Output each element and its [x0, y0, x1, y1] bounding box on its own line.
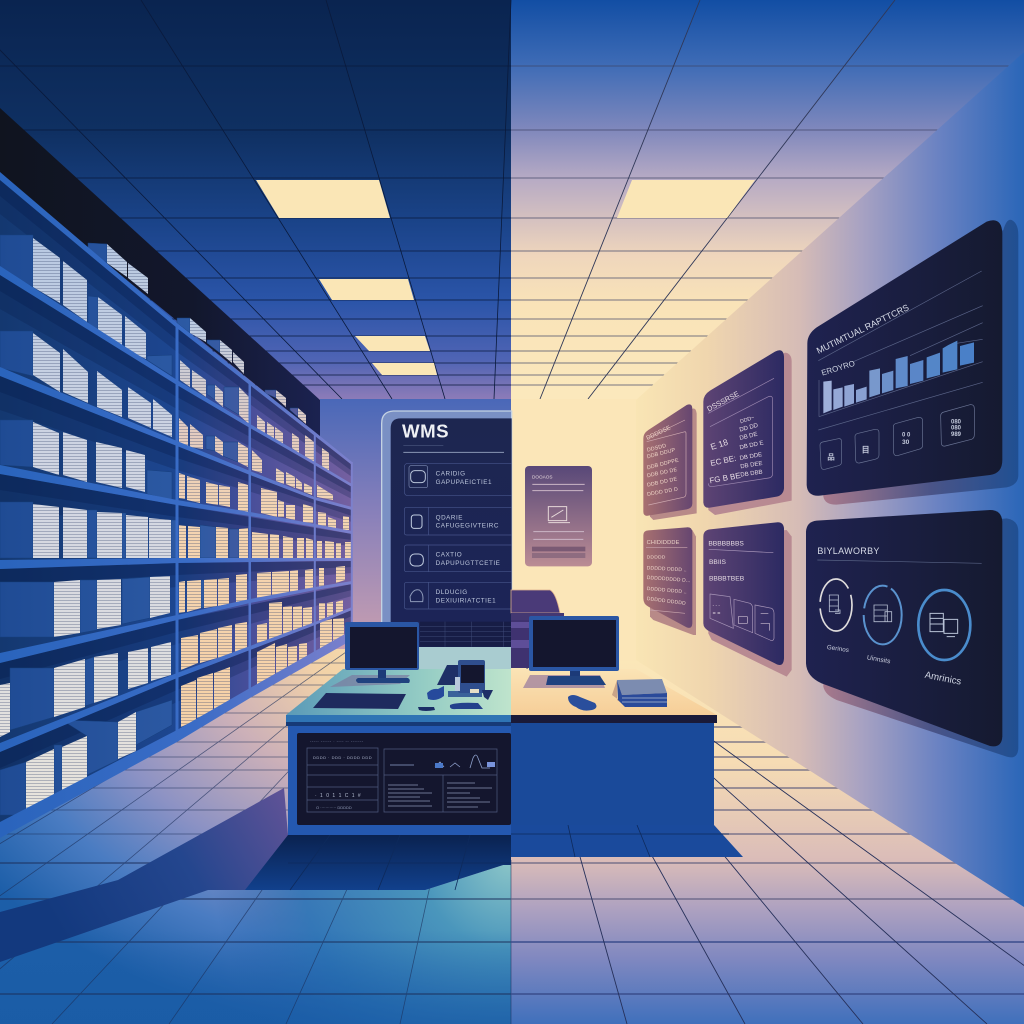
ring gauge: services — [820, 579, 852, 654]
keyboard — [313, 693, 406, 709]
desk front screen: · 1 0 1 1 C 1 # — [315, 793, 362, 799]
desk front screen — [297, 733, 511, 825]
WMS menu text: CAFUGEGIVTEIRC — [436, 522, 499, 529]
wall panel: operations table — [703, 350, 792, 515]
small wall card: DOOAOS — [532, 474, 552, 479]
panel heading: BIYLAWORBY — [817, 546, 880, 556]
status icons — [820, 405, 974, 469]
wall panel: small bottom: DDDDD DDDD .. — [646, 586, 687, 595]
wall panel: operations table: DB DEE — [740, 461, 763, 470]
back wall — [320, 399, 637, 661]
WMS wall panel — [382, 411, 512, 653]
desk front screen: O ············ DDDDD — [316, 805, 352, 810]
mouse — [568, 695, 596, 711]
ring gauge: analytics — [918, 590, 970, 688]
ring gauge: analytics: Amrinics — [924, 670, 962, 688]
wall panel: small bottom: DDDDD DDDD .. — [647, 565, 687, 573]
wall panel: service cards: BBIIS — [709, 559, 727, 566]
wall panel: operations table: EC BE: — [710, 454, 737, 468]
small wall card — [525, 466, 592, 566]
wall panel: operations table: DDD~ — [739, 415, 755, 425]
wall panel: operations table: FG B BE — [709, 471, 741, 485]
wall panel: metrics bar chart: 989 — [951, 432, 962, 438]
floor shadows — [0, 788, 743, 962]
ring gauge: units — [864, 586, 902, 666]
wall panel: operations table: DB DE — [739, 432, 758, 442]
chart title: MUTIMTUAL RAPTTCRS — [815, 302, 911, 356]
wall panel: metrics bar chart: EROYRO — [820, 359, 856, 378]
wall panel: service cards: = = — [713, 611, 720, 617]
wall panel: service cards: BBBBTBEB — [709, 576, 745, 583]
right side wall — [636, 52, 1024, 907]
wall panel: small top — [643, 404, 697, 520]
wall panel: small top: DDDDSE — [646, 425, 672, 442]
WMS menu text: DEXIUIRIATCTIE1 — [436, 598, 496, 605]
wall panel: metrics bar chart: 目 — [862, 446, 870, 455]
wall panel: service cards: - - - — [713, 603, 720, 608]
wall panel: metrics bar chart: 30 — [902, 439, 910, 446]
wall panel: small bottom: DDDDD — [647, 554, 666, 560]
wall panel: small top: DDDD DD D — [647, 487, 679, 498]
desk front screen: DDDD · DDD · DDDD DDD — [313, 755, 372, 760]
ceiling — [0, 0, 1024, 400]
stack of books — [612, 679, 667, 708]
WMS title: WMS — [402, 420, 449, 441]
desk — [286, 647, 717, 835]
ceiling lights — [256, 180, 755, 375]
sofa behind desk — [511, 590, 564, 668]
wall panel: metrics bar chart: 080 — [951, 419, 962, 425]
bars — [823, 341, 974, 413]
shelf boards and uprights — [0, 172, 353, 838]
wall panel: small bottom: CHIDIDDDE — [647, 540, 680, 546]
desk front screen: ----- ------ . ---- -- ------- — [310, 738, 364, 743]
wall panel: operations table: DSSSRSE — [705, 389, 741, 413]
wall panel: small top: DDB DD DE — [647, 467, 678, 479]
WMS menu rows — [404, 463, 512, 609]
left monitor — [345, 622, 419, 683]
wall panel: small top: DDSDD — [646, 443, 667, 454]
wall panel: small bottom: DDDDD DDDDD — [646, 596, 686, 607]
wall panel: service cards — [703, 522, 792, 677]
wall panel: small bottom: DDDDDDDDD D... — [647, 575, 691, 584]
shelving unit — [0, 108, 353, 838]
wall panel: small top: DDB DD DE — [647, 476, 678, 489]
WMS bottom table — [420, 622, 512, 647]
wall panel: small bottom — [643, 527, 696, 635]
wall panel: operations table: DD DD — [739, 423, 759, 434]
wall panel: metrics bar chart: 品 — [827, 452, 835, 461]
wall panel: operations table: E 18 — [709, 437, 729, 452]
wall panel: service cards: BBBBBBBS — [708, 541, 744, 548]
stored boxes: shaded sides — [0, 235, 298, 815]
WMS menu text: DLDUCIG — [436, 589, 468, 596]
WMS menu text: GAPUPAEICTIE1 — [436, 479, 492, 486]
ring gauge: units: Uinnsits — [866, 654, 892, 666]
monitor shadows and keyboard — [313, 675, 605, 709]
ring gauge: services: Gerinos — [826, 644, 849, 654]
wall panel: metrics bar chart: 080 — [951, 425, 962, 431]
wall panel: operations table: DB DD E — [739, 440, 764, 451]
wall panel: operations table: DB DDE — [739, 452, 763, 462]
right monitor — [529, 616, 619, 685]
WMS menu text: DAPUPUGTTCETIE — [436, 560, 500, 567]
stored boxes: lit paper faces — [0, 238, 351, 815]
WMS menu text: CARIDIG — [436, 471, 466, 478]
desk devices — [418, 660, 493, 711]
floor — [0, 540, 1024, 1024]
WMS menu text — [436, 471, 500, 605]
WMS menu text: CAXTIO — [436, 551, 462, 558]
wall panel: metrics bar chart: 0 0 — [902, 433, 911, 439]
wall panel: small top: DDB DDUP — [646, 447, 676, 460]
WMS menu text: QDARIE — [436, 514, 463, 521]
wall panel: inventory rings — [806, 510, 1018, 757]
wall panel: small top: DDB DDPPE — [646, 457, 680, 471]
wall panel: operations table: DB DBB — [740, 470, 763, 479]
wall panel: metrics bar chart — [807, 220, 1018, 505]
